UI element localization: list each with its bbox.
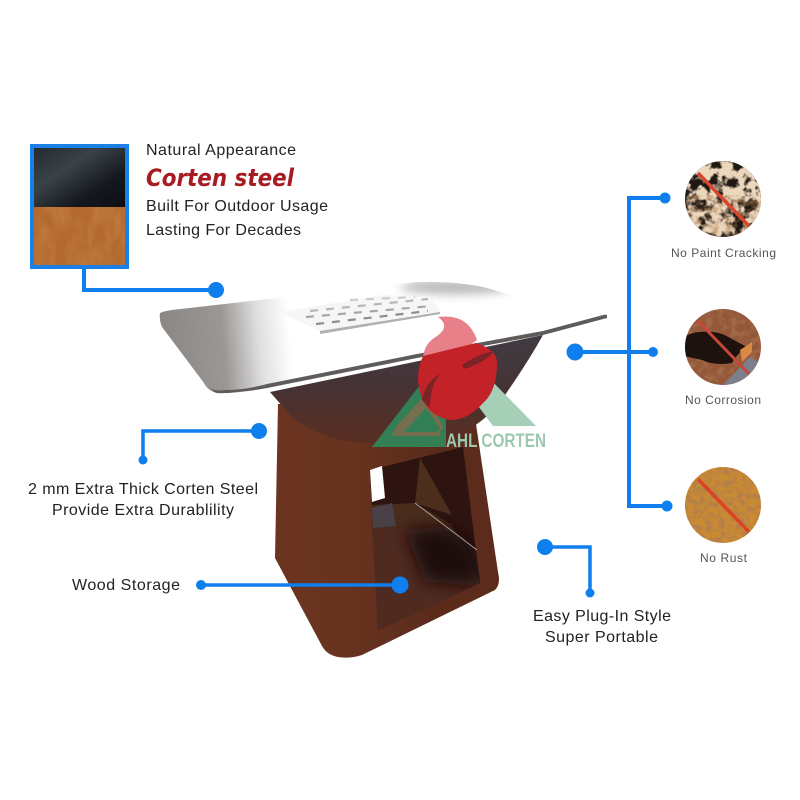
product: corten steel fire pit table <box>160 280 607 658</box>
text: extra thick steel: 2 mm Extra Thick Corten Steel <box>28 481 258 498</box>
text block: material description: Lasting For Decades <box>146 222 301 239</box>
funnel under top <box>270 335 543 444</box>
icon: no paint cracking <box>685 161 761 237</box>
base: rust steel body <box>275 404 499 658</box>
text: plug-in style: Super Portable <box>545 629 658 646</box>
text: wood storage: Wood Storage <box>72 577 180 594</box>
icon: no corrosion <box>685 309 761 385</box>
connector: extra thick steel <box>138 423 267 464</box>
text: extra thick steel <box>28 481 258 519</box>
text block: material description: Natural Appearance <box>146 142 296 159</box>
label: no rust: No Rust <box>700 551 748 565</box>
grate plate <box>280 295 440 334</box>
connector: plug-in style <box>537 539 594 598</box>
watermark: AHL Corten logo <box>372 316 546 452</box>
flame <box>418 316 497 420</box>
connector: bracket to three benefits <box>566 192 672 512</box>
table top plate <box>160 280 607 394</box>
heading: Corten steel: Corten steel <box>146 164 295 192</box>
connector: swatch to table top <box>84 269 224 298</box>
label: no corrosion: No Corrosion <box>685 393 761 407</box>
text block: material description: Built For Outdoor Usage <box>146 198 328 215</box>
text: plug-in style: Easy Plug-In Style <box>533 608 671 625</box>
text: plug-in style <box>533 608 671 646</box>
connector: wood storage <box>196 576 408 594</box>
icon: no rust <box>685 467 761 543</box>
logo wordmark: AHL CORTEN <box>446 431 546 452</box>
swatch: black steel to rust transition <box>32 146 127 267</box>
storage opening <box>370 447 482 630</box>
text: extra thick steel: Provide Extra Durablility <box>52 502 234 519</box>
text block: material description <box>146 142 328 239</box>
label: no paint cracking: No Paint Cracking <box>671 246 776 260</box>
